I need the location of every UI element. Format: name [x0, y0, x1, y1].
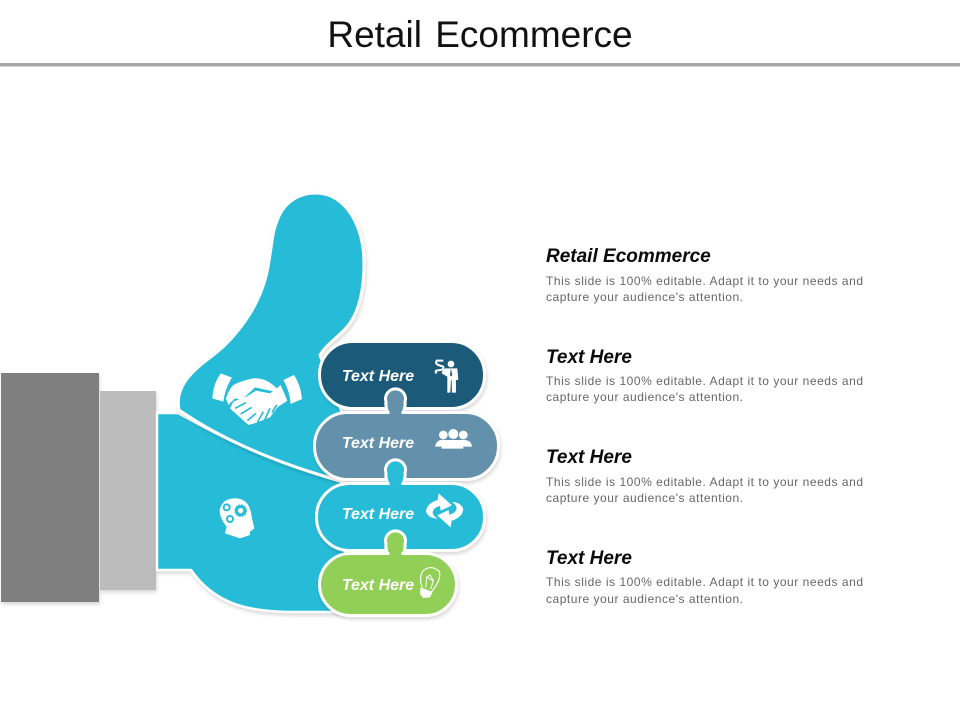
label: Text Here	[342, 368, 414, 385]
text block 3	[546, 447, 863, 505]
panel: puzzle pill 1 (dark blue)	[320, 342, 484, 408]
text block 2: This slide is 100% editable. Adapt it to your needs and	[546, 374, 863, 388]
icon: light bulb	[420, 568, 440, 598]
palm and fingers	[157, 413, 345, 612]
icon: businessman with dollar	[436, 361, 458, 393]
panel: puzzle pill 4 (green)	[320, 531, 456, 616]
panel: puzzle pill 2 (steel blue)	[314, 389, 498, 480]
header rule	[0, 63, 960, 66]
icon: group of people	[435, 429, 472, 449]
puzzle knob	[386, 389, 406, 416]
text block 2: capture your audience's attention.	[546, 390, 743, 404]
puzzle knob	[386, 460, 406, 487]
thumb	[178, 193, 364, 482]
text block 1: Retail Ecommerce	[546, 246, 711, 267]
puzzle knob	[386, 531, 406, 558]
text block 3: Text Here	[546, 447, 632, 468]
text block 1	[546, 246, 863, 304]
panel: puzzle pill 3 (cyan)	[316, 460, 484, 550]
text block 2: Text Here	[546, 347, 632, 368]
text block 1: This slide is 100% editable. Adapt it to your needs and	[546, 274, 863, 288]
icon: handshake	[212, 373, 302, 425]
shirt cuff	[100, 391, 156, 590]
text block 3: capture your audience's attention.	[546, 491, 743, 505]
text block 4: capture your audience's attention.	[546, 592, 743, 606]
title: Retail Ecommerce	[327, 14, 633, 55]
text block 4: Text Here	[546, 548, 632, 569]
label: Text Here	[342, 435, 414, 452]
label: Text Here	[342, 506, 414, 523]
text block 3: This slide is 100% editable. Adapt it to your needs and	[546, 475, 863, 489]
panel: thumbs-up hand	[157, 193, 364, 612]
label: Text Here	[342, 577, 414, 594]
text block 2	[546, 347, 863, 404]
text block 1: capture your audience's attention.	[546, 290, 743, 304]
text block 4: This slide is 100% editable. Adapt it to your needs and	[546, 575, 863, 589]
jacket sleeve	[1, 373, 99, 602]
panel: sleeve	[1, 373, 156, 602]
icon: cycle arrows	[426, 493, 463, 527]
text block 4	[546, 548, 863, 606]
icon: head with gears	[220, 498, 254, 538]
